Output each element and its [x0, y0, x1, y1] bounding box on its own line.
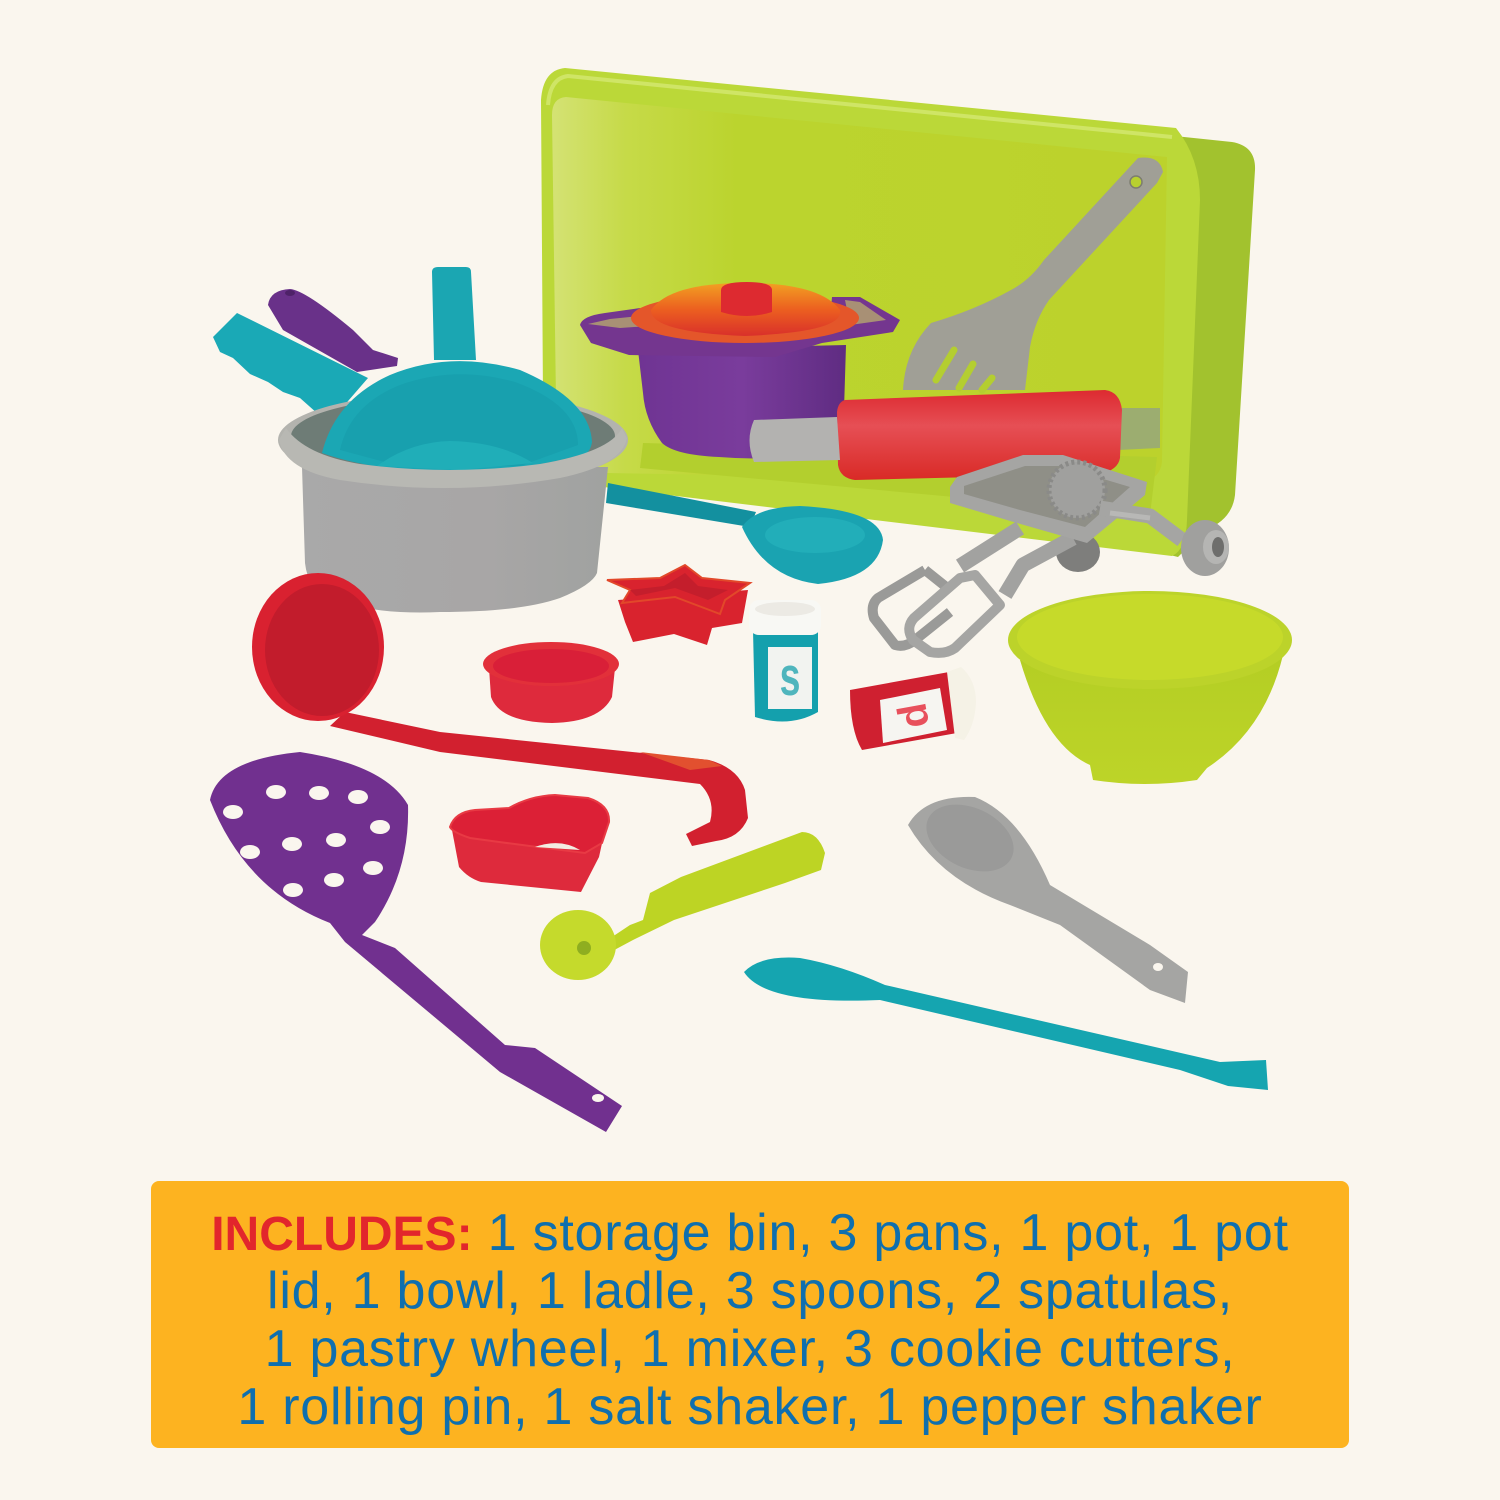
pastry wheel	[540, 832, 825, 980]
upright teal handle	[432, 267, 476, 360]
rolling pin	[750, 390, 1160, 480]
red ladle	[252, 573, 748, 846]
purple pan handle	[268, 289, 398, 372]
saucepan front rim	[279, 428, 627, 488]
teal long spoon	[744, 958, 1268, 1090]
round cookie cutter	[483, 642, 619, 723]
heart cookie cutter	[450, 795, 609, 892]
includes text line 2: lid, 1 bowl, 1 ladle, 3 spoons, 2 spatulas,	[267, 1262, 1233, 1320]
slotted spatula inside bin	[903, 158, 1163, 390]
includes panel	[151, 1181, 1349, 1448]
purple pot with orange lid	[580, 282, 900, 458]
salt shaker	[749, 600, 821, 721]
star cookie cutter	[607, 565, 750, 645]
purple slotted turner	[210, 752, 622, 1132]
storage bin	[541, 68, 1255, 557]
salt label letter: s	[780, 645, 800, 707]
gray saucepan	[278, 392, 628, 612]
teal scalloped pan handle	[213, 313, 368, 414]
teal pan in saucepan	[322, 361, 592, 472]
includes text line 4: 1 rolling pin, 1 salt shaker, 1 pepper shaker	[237, 1378, 1263, 1436]
green mixing bowl	[1008, 591, 1292, 784]
pepper label letter: p	[895, 699, 943, 731]
hand mixer	[873, 455, 1229, 653]
gray spoon	[908, 791, 1188, 1003]
includes text line 3: 1 pastry wheel, 1 mixer, 3 cookie cutters,	[265, 1320, 1235, 1378]
includes text line 1: INCLUDES: 1 storage bin, 3 pans, 1 pot, 1 pot	[211, 1204, 1289, 1262]
teal ladle, small	[606, 483, 883, 584]
pepper shaker	[850, 667, 976, 750]
